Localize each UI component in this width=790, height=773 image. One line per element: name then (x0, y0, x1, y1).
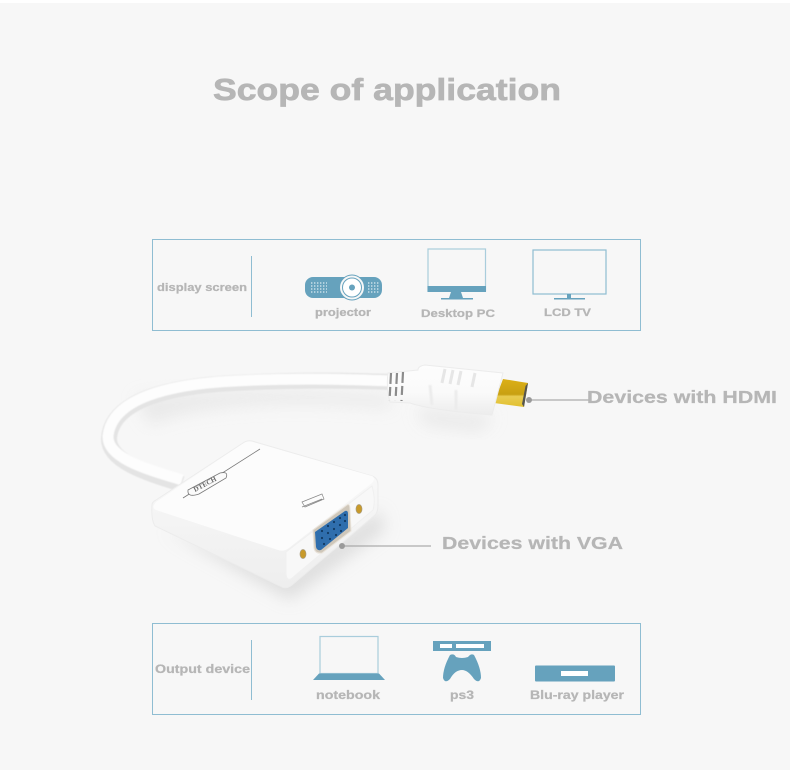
callout: VGA: Devices with VGA (442, 533, 623, 553)
panel: display screen (152, 240, 640, 330)
callout: HDMI (526, 387, 777, 407)
label: projector: projector (315, 307, 372, 319)
VGA port (313, 505, 351, 553)
brand mark: DTECH (192, 475, 218, 494)
VGA symbol (302, 494, 324, 507)
panel: output device (152, 624, 640, 714)
label: desktop PC: Desktop PC (421, 308, 495, 320)
HDMI gold tip (494, 379, 528, 407)
shadows (135, 390, 390, 425)
panel heading: output device: Output device (155, 662, 250, 676)
icon: desktop PC (428, 249, 486, 300)
callout: VGA (339, 533, 623, 553)
panel heading: display screen: display screen (157, 282, 247, 294)
adapter product image (108, 365, 528, 600)
label: LCD TV: LCD TV (544, 307, 592, 319)
icon: ps3 (433, 641, 491, 681)
VGA adapter body (152, 441, 378, 588)
title: Scope of application (213, 72, 561, 107)
callout: HDMI: Devices with HDMI (587, 387, 777, 407)
label: notebook: notebook (316, 688, 380, 702)
label: Blu-ray player: Blu-ray player (530, 688, 624, 702)
icon: notebook (313, 636, 385, 680)
brand mark (183, 449, 260, 498)
icon: Blu-ray player (535, 666, 615, 682)
label: ps3: ps3 (450, 688, 474, 702)
icon: LCD TV (533, 250, 606, 300)
icon: projector (305, 274, 382, 300)
cable (108, 379, 392, 484)
screws (300, 504, 362, 558)
HDMI plug body (387, 365, 503, 415)
